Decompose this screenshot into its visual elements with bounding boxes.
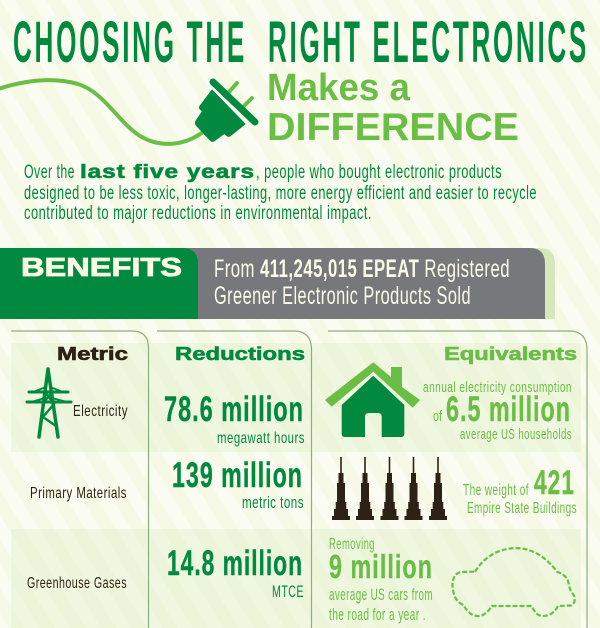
equivalent: buildings: 421 bbox=[534, 464, 575, 502]
column headings bbox=[57, 344, 577, 364]
metric labels: Primary Materials bbox=[30, 485, 127, 502]
equivalent: cars: Removing bbox=[329, 536, 375, 553]
table column outlines bbox=[11, 331, 587, 628]
reduction figures: MTCE bbox=[272, 582, 304, 601]
equivalent: buildings bbox=[463, 464, 577, 517]
reduction figures: metric tons bbox=[242, 493, 304, 512]
metric labels: Greenhouse Gases bbox=[27, 575, 127, 592]
row backgrounds bbox=[11, 343, 581, 628]
title: CHOOSING THE bbox=[13, 10, 247, 75]
icon: Empire State Buildings bbox=[332, 457, 447, 520]
banner text: Greener Electronic Products Sold bbox=[214, 282, 471, 310]
benefits label: BENEFITS bbox=[21, 252, 182, 282]
reduction figures: 139 million bbox=[172, 456, 303, 495]
metric labels: Electricity bbox=[73, 403, 128, 420]
icon: house bbox=[325, 362, 420, 437]
column headings: Equivalents bbox=[444, 344, 577, 364]
equivalent: cars: 9 million bbox=[329, 548, 433, 585]
column headings: Metric bbox=[57, 344, 128, 364]
equivalent: cars: the road for a year . bbox=[329, 605, 426, 624]
reduction figures: megawatt hours bbox=[217, 430, 305, 447]
intro paragraph: last five years bbox=[80, 162, 255, 183]
intro paragraph: Over the bbox=[24, 162, 75, 183]
subtitle bbox=[267, 67, 519, 149]
banner text bbox=[214, 255, 510, 310]
equivalent: electricity bbox=[423, 379, 572, 443]
icon: electricity pylon bbox=[27, 369, 71, 437]
equivalent: cars bbox=[329, 536, 433, 624]
intro paragraph: contributed to major reductions in environmental impact. bbox=[24, 203, 372, 224]
equivalent: electricity: of bbox=[433, 408, 443, 425]
reduction figures: 78.6 million bbox=[164, 390, 304, 429]
icon: dashed car outline bbox=[452, 548, 575, 616]
subtitle: Makes a bbox=[267, 67, 411, 109]
icon: plug and cord bbox=[0, 80, 255, 144]
column headings: Reductions bbox=[175, 344, 305, 364]
intro paragraph bbox=[24, 162, 537, 224]
metric labels bbox=[27, 403, 128, 592]
equivalent: cars: average US cars from bbox=[329, 585, 433, 604]
equivalent: buildings: The weight of bbox=[463, 482, 529, 499]
banner text: From 411,245,015 EPEAT Registered bbox=[214, 255, 510, 283]
subtitle: DIFFERENCE bbox=[267, 106, 519, 149]
reduction figures bbox=[164, 390, 305, 601]
benefits banner bbox=[0, 248, 555, 319]
reduction figures: 14.8 million bbox=[167, 544, 303, 583]
